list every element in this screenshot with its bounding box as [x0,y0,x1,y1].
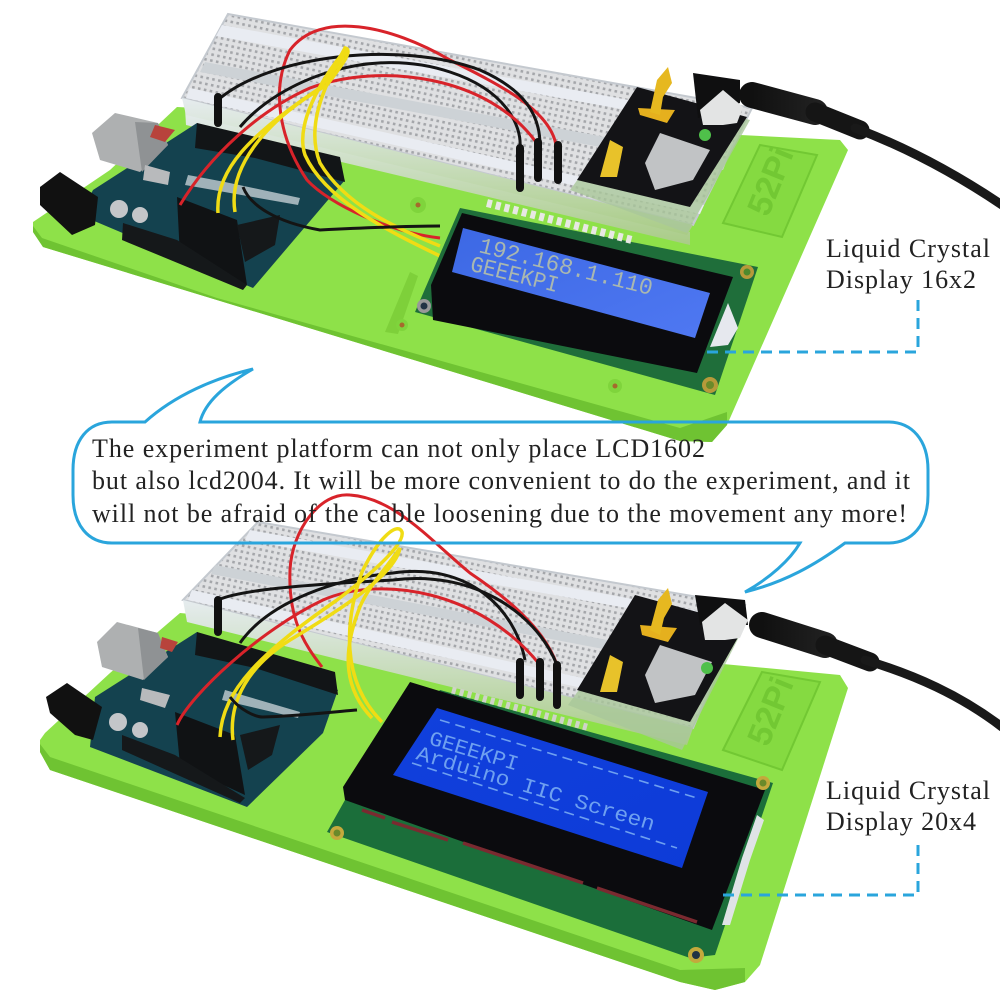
LCD 20x4 module [327,682,773,963]
LCD 20x4 screen text: Arduino IIC Screen [413,744,657,837]
jumper wires [177,495,557,740]
power cable [762,625,1000,727]
leader line: 20x4 [718,845,918,895]
callout text: but also lcd2004. It will be more convenient to do the experiment, and it [92,466,911,495]
LCD 16x2 screen text: GEEEKPI [468,252,561,299]
label: Liquid Crystal Display 20x4 [826,776,990,836]
plate logo: 52Pi [740,142,802,221]
Arduino board [46,622,338,807]
speech bubble callout [73,369,928,592]
green base plate [40,613,848,990]
LCD 16x2 module [415,203,758,395]
green base plate [33,107,848,442]
jumper wires [180,26,558,256]
label: Liquid Crystal Display 16x2: Liquid Crystal [826,234,990,263]
label: Liquid Crystal Display 20x4: Liquid Crystal [826,776,990,805]
label: Liquid Crystal Display 20x4: Display 20x4 [826,807,976,836]
leader line: 16x2 [703,300,918,352]
breadboard [182,14,752,245]
bottom kit photo: breadboard with LCD 20x4 [40,495,1000,990]
breadboard [183,522,745,745]
plate logo: 52Pi [740,672,802,751]
power module [568,588,748,750]
callout text: will not be afraid of the cable loosening due to the movement any more! [92,499,907,528]
LCD 20x4 screen text: GEEEKPI [426,729,521,777]
label: Liquid Crystal Display 16x2: Display 16x2 [826,265,976,294]
Arduino board [40,113,345,290]
label: Liquid Crystal Display 16x2 [826,234,990,294]
LCD 16x2 screen text: 192.168.1.110 [476,234,655,302]
top kit photo: breadboard with LCD 16x2 [33,14,1000,442]
power module [570,67,750,233]
power cable [752,95,1000,205]
callout text [92,434,911,528]
callout text: The experiment platform can not only place LCD1602 [92,434,705,463]
